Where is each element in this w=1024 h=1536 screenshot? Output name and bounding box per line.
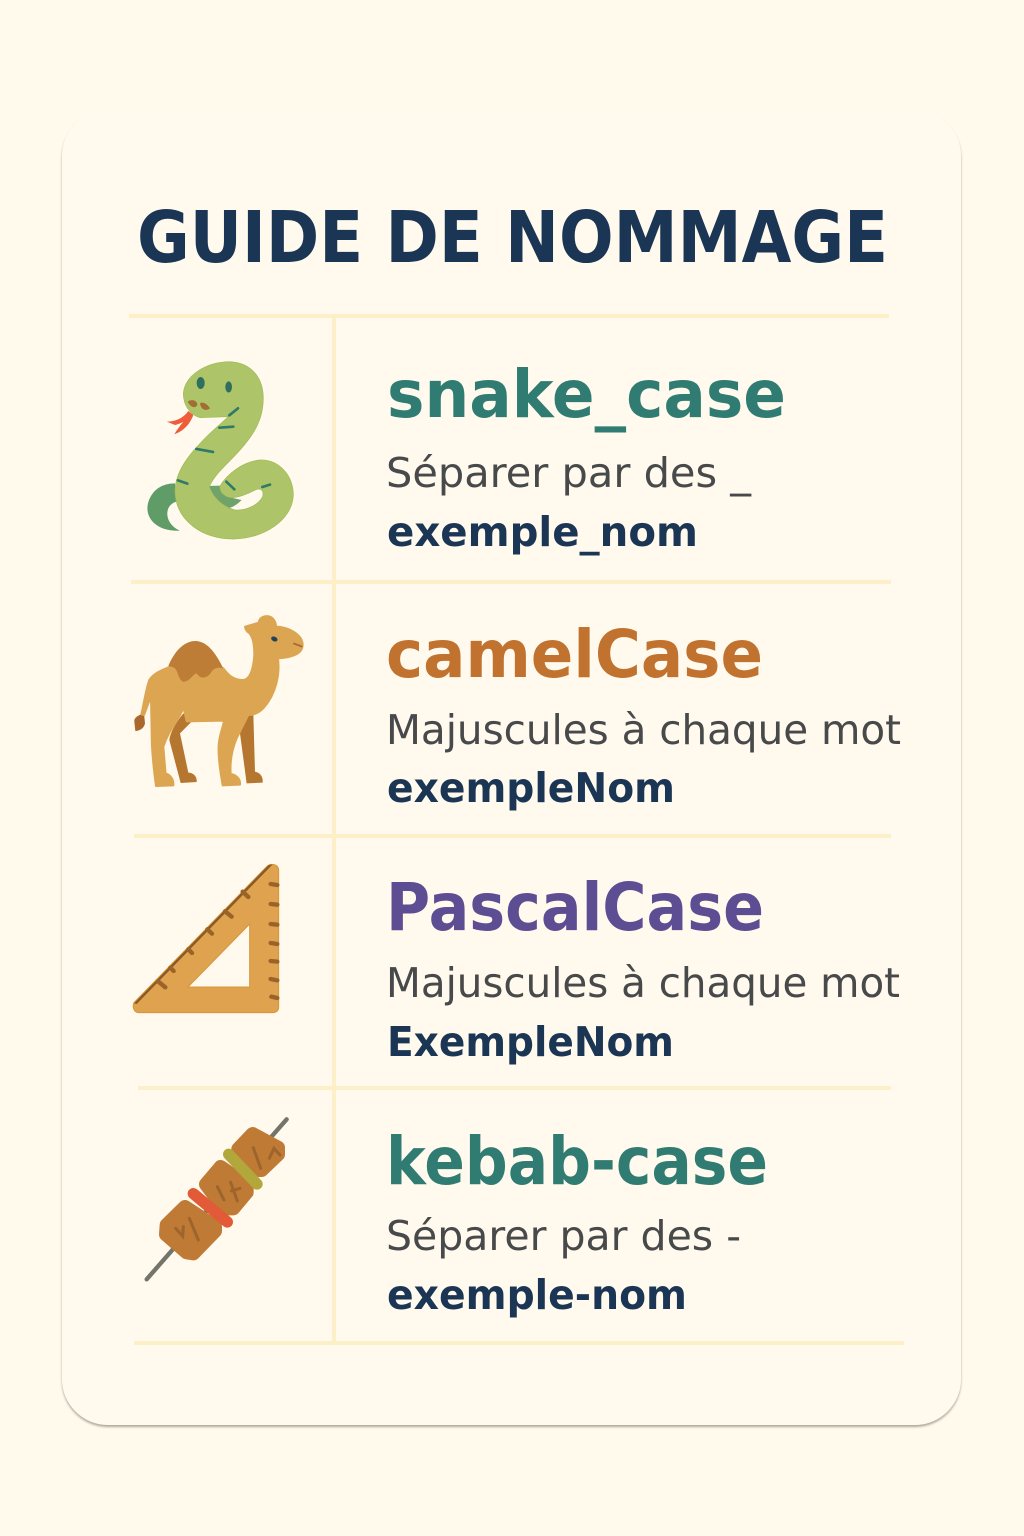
icon: set square ruler (133, 864, 279, 1013)
icon: kebab skewer (147, 1119, 287, 1279)
description: Séparer par des - (386, 1212, 741, 1260)
row: camelCase (134, 616, 901, 812)
example: ExempleNom (387, 1018, 674, 1066)
icon: camel (134, 616, 303, 786)
row: kebab-case (147, 1119, 768, 1319)
row: PascalCase (133, 864, 900, 1066)
example: exemple_nom (387, 508, 698, 556)
title: GUIDE DE NOMMAGE (137, 196, 888, 279)
name: kebab-case (386, 1123, 768, 1200)
name: PascalCase (386, 869, 764, 946)
row: snake_case (147, 356, 786, 556)
name: camelCase (386, 616, 763, 693)
description: Majuscules à chaque mot (386, 706, 901, 754)
example: exemple-nom (387, 1271, 687, 1319)
description: Majuscules à chaque mot (386, 959, 900, 1007)
icon: snake (147, 362, 293, 539)
card panel (62, 110, 961, 1425)
description: Séparer par des _ (386, 449, 752, 497)
name: snake_case (387, 356, 786, 433)
example: exempleNom (387, 764, 675, 812)
